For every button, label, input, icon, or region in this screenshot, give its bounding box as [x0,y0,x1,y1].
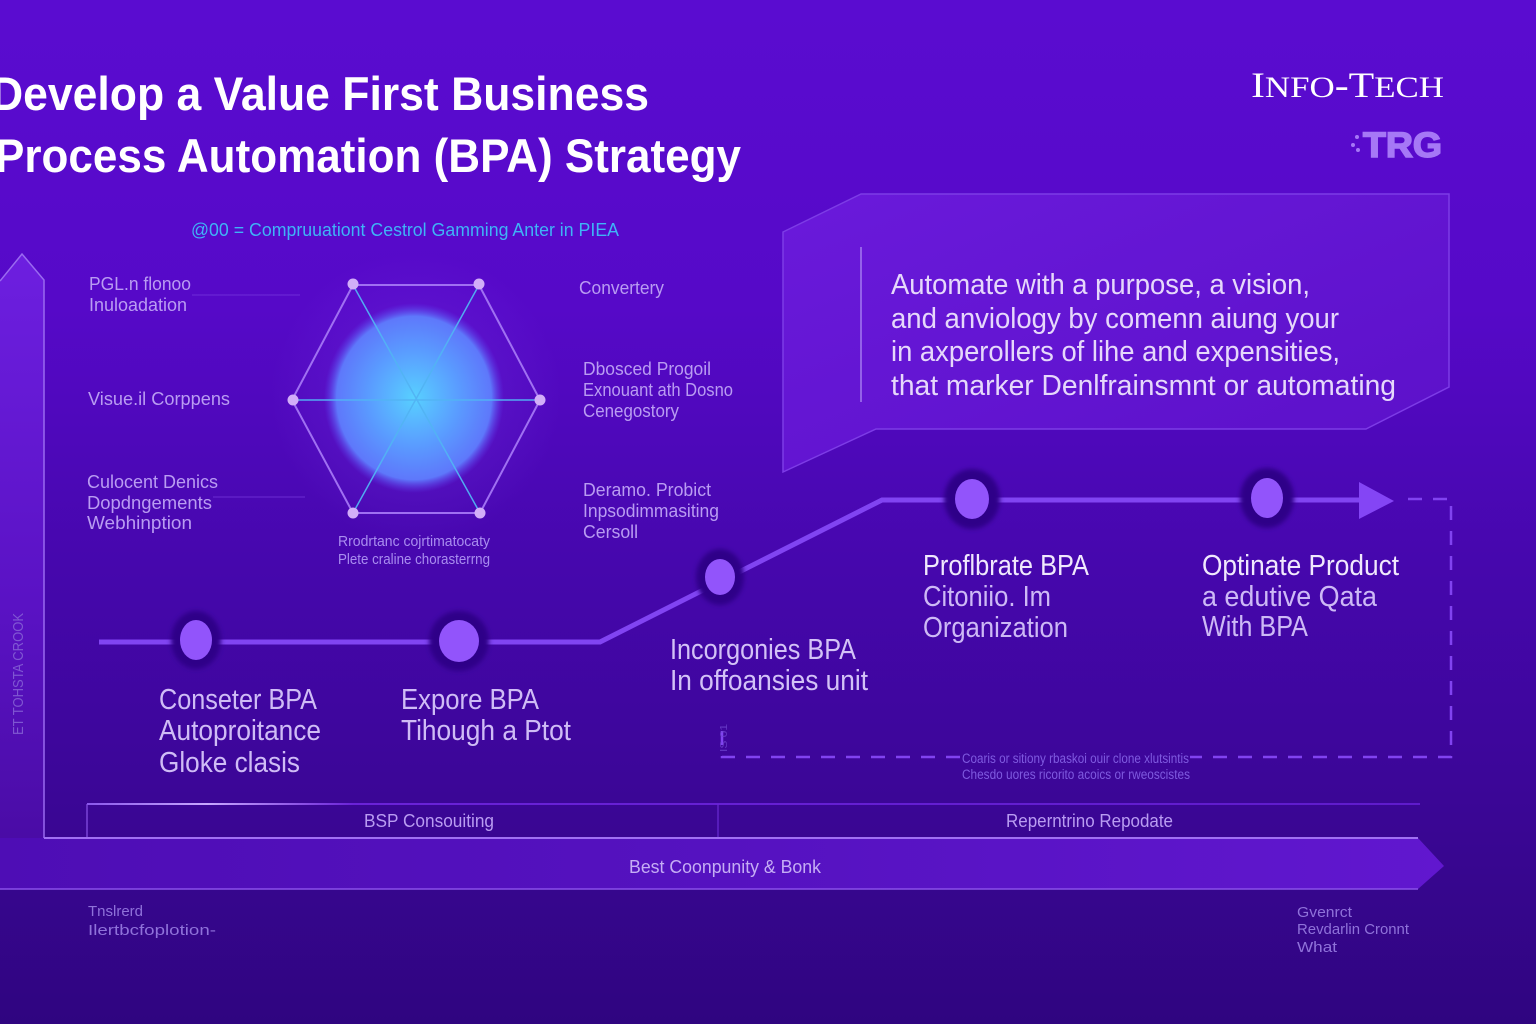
callout panel [783,194,1449,472]
milestone 3 label: Incorgonies BPA [670,634,857,666]
footnote right [1297,904,1410,956]
milestone 4 label [923,550,1090,644]
spokes [292,285,540,513]
milestone nodes [171,468,1294,671]
milestone 5 label [1202,550,1399,643]
milestone 4 label: Proflbrate BPA [923,550,1090,582]
roadmap arrowhead [1359,482,1394,519]
dashed loop caption: Coaris or sitiony rbaskoi ouir clone xlutsintis [962,751,1189,766]
hexagon diagram [271,252,561,542]
callout text [891,269,1396,402]
footnote right: Gvenrct [1297,904,1353,921]
title: Process Automation (BPA) Strategy [0,129,741,182]
title [0,67,741,182]
milestone 2 label [401,684,571,747]
hexagon outline [292,285,540,513]
hexagon caption: Rrodrtanc cojrtimatocaty [338,534,491,550]
footnote right: What [1297,939,1338,956]
footnote left: Ilertbcfoplotion- [88,922,216,939]
hexagon caption [338,534,491,568]
milestone 2 label: Expore BPA [401,684,540,716]
hexagon caption: Plete craline chorasterrng [338,552,490,568]
milestone 4 label: Citoniio. Im [923,581,1051,613]
footnote left [88,903,216,939]
hexagon labels left: Inuloadation [89,295,187,315]
chart heading: @00 = Compruuationt Cestrol Gamming Anter in PIEA [191,220,619,240]
hexagon labels right: Cenegostory [583,401,679,421]
left upward arrow [0,254,44,838]
title: Develop a Value First Business [0,67,649,120]
hexagon labels right: Convertery [579,278,664,298]
milestone 1 label [159,684,321,779]
bottom band arrow [0,838,1444,889]
milestone 4 label: Organization [923,612,1068,644]
hexagon labels right: Deramo. Probict [583,480,711,500]
callout text: Automate with a purpose, a vision, [891,269,1310,301]
dashed loop caption [962,751,1190,782]
milestone 5 label: Optinate Product [1202,550,1399,582]
table cell labels [364,811,1173,831]
callout text: and anviology by comenn aiung your [891,303,1339,335]
milestone 3 label: In offoansies unit [670,665,868,697]
milestone 1 label: Autoproitance [159,715,321,747]
dashed loop caption: Chesdo uores ricorito acoics or rweoscistes [962,767,1190,782]
footnote right: Revdarlin Cronnt [1297,921,1410,938]
table cell labels: BSP Consouiting [364,811,494,831]
callout text: in axperollers of lihe and expensities, [891,336,1340,368]
hexagon labels right: Exnouant ath Dosno [583,380,733,400]
hexagon labels left [87,274,230,533]
nodes [288,278,546,518]
roadmap line [99,468,1451,757]
milestone 1 label: Conseter BPA [159,684,318,716]
logo: TRG: TRG [1363,126,1442,165]
table cell labels: Reperntrino Repodate [1006,811,1173,831]
arrow vertical label: ET TOHSTA CROOK [10,613,27,735]
band label: Best Coonpunity & Bonk [629,857,822,877]
small tick label: IS 01 [719,723,730,752]
hexagon labels right: Inpsodimmasiting [583,501,719,521]
milestone 5 label: a edutive Qata [1202,581,1378,613]
hexagon labels right: Dbosced Progoil [583,359,711,379]
logo: Info-Tech: INFO -TECH [1251,65,1444,105]
hexagon halo [271,252,561,542]
feedback dashed loop [722,499,1451,757]
hexagon labels right [579,278,733,542]
hexagon labels left: PGL.n flonoo [89,274,191,294]
milestone 2 label: Tihough a Ptot [401,715,571,747]
hexagon labels left: Culocent Denics [87,472,218,492]
hexagon labels left: Dopdngements [87,493,212,513]
hexagon labels left: Webhinption [87,513,192,533]
hexagon labels left: Visue.il Corppens [88,389,230,409]
milestone 3 label [670,634,868,697]
milestone 1 label: Gloke clasis [159,747,300,779]
central orb [324,303,504,493]
leader lines [192,295,305,497]
milestone 5 label: With BPA [1202,611,1309,643]
hexagon labels right: Cersoll [583,522,638,542]
callout text: that marker Denlfrainsmnt or automating [891,370,1396,402]
table strip [87,803,1420,837]
footnote left: Tnslrerd [88,903,143,920]
